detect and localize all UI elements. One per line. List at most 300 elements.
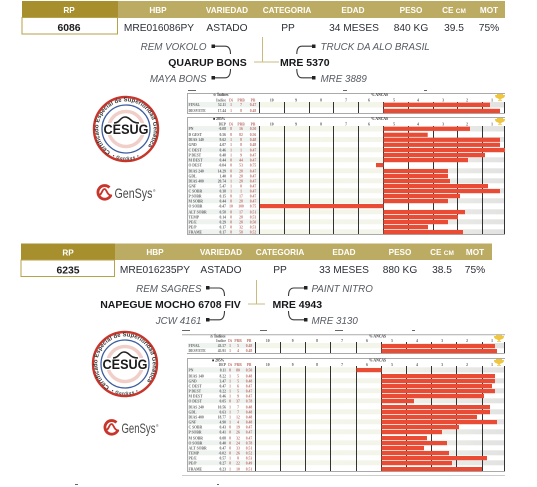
- chart: DEP traits: 0.23: [220, 468, 226, 472]
- pedigree: MRE 4943: [272, 299, 322, 311]
- logo: GenSys: GenSys: [122, 420, 156, 436]
- data row: ASTADO: [206, 23, 248, 34]
- chart: DEP traits: 0.47: [250, 179, 256, 183]
- chart: DEP traits: 3: [442, 122, 444, 126]
- pedigree: [141, 37, 430, 85]
- icon: trophy: [495, 118, 505, 125]
- chart: indices summary: DESVETE: [188, 349, 206, 353]
- chart: DEP traits: GND: [188, 143, 197, 147]
- chart: DEP traits: 1: [229, 410, 231, 414]
- chart: DEP traits: ■ 285%: [213, 117, 226, 121]
- data row: 33 MESES: [319, 265, 369, 276]
- pedigree: NAPEGUE MOCHO 6708 FIV: [100, 299, 241, 311]
- chart: DEP traits: PN: [188, 127, 194, 131]
- data row: MRE016086PY: [124, 23, 194, 34]
- chart: DEP traits: PE/P: [188, 462, 197, 466]
- chart: DEP traits: 0.47: [250, 153, 256, 157]
- chart: DEP traits: 0.47: [250, 184, 256, 188]
- chart: DEP traits: 1: [491, 122, 493, 126]
- chart: indices summary: PB: [247, 339, 252, 343]
- chart: DEP traits: 28: [239, 179, 243, 183]
- pedigree: PAINT NITRO: [312, 284, 373, 295]
- chart: indices summary: 2: [466, 98, 468, 102]
- chart: DEP traits: 5: [237, 374, 239, 378]
- chart: DEP traits: TEMP: [188, 215, 200, 219]
- chart: DEP traits: 58: [239, 230, 243, 234]
- logo: GenSys: [105, 420, 159, 436]
- chart: DEP traits: 8: [229, 400, 231, 404]
- chart: DEP traits: 1: [491, 363, 493, 367]
- chart: DEP traits: 8: [230, 225, 232, 229]
- chart: DEP traits: 0.47: [246, 394, 252, 398]
- chart: DEP traits: 5: [237, 390, 239, 394]
- header bar: [22, 1, 505, 18]
- chart: DEP traits: 22: [236, 462, 240, 466]
- chart: indices summary: 10: [270, 98, 274, 102]
- chart: DEP traits: 8: [229, 462, 231, 466]
- chart: DEP traits: 1: [230, 143, 232, 147]
- chart: DEP traits: 0.53: [250, 215, 256, 219]
- chart: DEP traits: 8: [229, 442, 231, 446]
- icon: trophy: [495, 94, 505, 101]
- seal: CESUG: Certificado Especial de Superioridad Genética: [94, 97, 158, 154]
- chart: indices summary: 1: [230, 103, 232, 107]
- chart: indices summary: 6: [366, 339, 368, 343]
- chart: DEP traits: P DEST: [188, 153, 202, 157]
- chart: DEP traits: 8: [240, 184, 242, 188]
- chart: DEP traits: 1: [229, 456, 231, 460]
- chart: indices summary: 4: [237, 349, 239, 353]
- data row: 75%: [479, 23, 499, 34]
- chart: DEP traits: 0.47: [220, 384, 226, 388]
- chart: indices summary: 10: [266, 339, 270, 343]
- chart: DEP traits: 0.40: [220, 442, 226, 446]
- chart: DEP traits: 0.47: [246, 426, 252, 430]
- chart: DEP traits: 8: [240, 138, 242, 142]
- data row: [21, 260, 485, 276]
- chart: indices summary: 7: [240, 103, 242, 107]
- header bar: RP: [63, 6, 75, 15]
- chart: DEP traits: O SOBR: [188, 204, 203, 208]
- chart: DEP traits: 8: [240, 143, 242, 147]
- chart: DEP traits: 0.48: [246, 406, 252, 410]
- data row: MRE016235PY: [120, 265, 190, 276]
- chart: indices summary: 1: [229, 349, 231, 353]
- chart: indices summary: 2: [466, 339, 468, 343]
- chart: DEP traits: 8: [229, 368, 231, 372]
- chart: DEP traits: C SOBR: [188, 189, 202, 193]
- chart: indices summary: PRB: [234, 339, 242, 343]
- header bar: VARIEDAD: [206, 6, 248, 15]
- header bar: [21, 244, 492, 260]
- chart: indices summary: % ANCAS: [371, 93, 388, 97]
- chart: DEP traits: 0.50: [250, 127, 256, 131]
- chart: DEP traits: 4: [416, 363, 418, 367]
- chart: DEP traits: 4: [237, 420, 239, 424]
- chart: DEP traits: 5: [393, 122, 395, 126]
- chart: DEP traits: 0.50: [246, 368, 252, 372]
- chart: DEP traits: TEMP: [188, 452, 200, 456]
- chart: DEP traits: C DEST: [188, 384, 202, 388]
- chart: DEP traits: 80: [236, 368, 240, 372]
- section: animal 6086: [22, 1, 505, 235]
- chart: DEP traits: 8: [230, 169, 232, 173]
- pedigree: QUARUP BONS: [168, 57, 247, 69]
- chart: DEP traits: 17: [239, 194, 243, 198]
- pedigree: REM SAGRES: [136, 284, 202, 295]
- chart: DEP traits: 1: [229, 420, 231, 424]
- data row: ASTADO: [200, 265, 242, 276]
- chart: DEP traits: 1.40: [220, 174, 226, 178]
- chart: indices summary: 7: [345, 98, 347, 102]
- chart: indices summary: 0.48: [246, 349, 252, 353]
- chart: DEP traits: 32: [239, 225, 243, 229]
- chart: DEP traits: M DEST: [188, 158, 203, 162]
- chart: DEP traits: 0.44: [220, 199, 226, 203]
- chart: DEP traits: 16: [239, 127, 243, 131]
- chart: indices summary: Indice: [216, 339, 226, 343]
- chart: DEP traits: 2: [466, 363, 468, 367]
- chart: DEP traits: 10.56: [218, 406, 226, 410]
- chart: DEP traits: 7: [237, 406, 239, 410]
- header bar: PESO: [400, 6, 423, 15]
- chart: DEP traits: 0.47: [250, 158, 256, 162]
- chart: DEP traits: 1: [240, 189, 242, 193]
- chart: DEP traits: 0.47: [246, 384, 252, 388]
- chart: DEP traits: 8: [230, 230, 232, 234]
- header bar: HBP: [146, 248, 164, 257]
- chart: DEP traits: 0.78: [246, 442, 252, 446]
- icon: trophy: [494, 359, 504, 366]
- pedigree: [100, 280, 373, 327]
- chart: DEP traits: 0.46: [220, 394, 226, 398]
- pedigree: REM VOKOLO: [141, 42, 207, 53]
- chart: indices summary: % ANCAS: [369, 334, 386, 338]
- chart: indices summary: 17.44: [218, 109, 226, 113]
- chart: DEP traits: 24: [236, 442, 240, 446]
- chart: DEP traits: 53: [239, 163, 243, 167]
- chart: DEP traits: DIAS 400: [188, 179, 204, 183]
- chart: DEP traits: 1: [230, 179, 232, 183]
- pedigree: MAYA BONS: [150, 74, 207, 85]
- chart: DEP traits: 0.52: [250, 230, 256, 234]
- chart: DEP traits: DIAS 240: [188, 406, 204, 410]
- chart: DEP traits: 6: [366, 363, 368, 367]
- chart: DEP traits: PRB: [237, 122, 245, 126]
- data row: 880 KG: [383, 265, 417, 276]
- chart: DEP traits: 0.46: [220, 148, 226, 152]
- chart: DEP traits: 0.14: [220, 215, 226, 219]
- chart: DEP traits: 0.63: [220, 410, 226, 414]
- chart: DEP traits: 1: [229, 406, 231, 410]
- chart: DEP traits: D GEST: [188, 133, 202, 137]
- pedigree: JCW 4161: [155, 316, 202, 327]
- chart: DEP traits: 0.48: [246, 420, 252, 424]
- chart: DEP traits: P DEST: [188, 390, 202, 394]
- chart: DEP traits: 0.75: [250, 204, 256, 208]
- chart: DEP traits: 10: [229, 204, 233, 208]
- chart: DEP traits: 28: [239, 199, 243, 203]
- chart: DEP traits: GND: [188, 380, 197, 384]
- chart: DEP traits: -0.04: [218, 163, 226, 167]
- header bar: EDAD: [341, 6, 365, 15]
- chart: DEP traits: 4: [417, 122, 419, 126]
- chart: DEP traits: 20.74: [218, 179, 226, 183]
- chart: DEP traits: % ANCAS: [369, 358, 386, 362]
- header bar: EDAD: [332, 248, 356, 257]
- seal: CESUG: • GenSys •: [112, 390, 138, 396]
- chart: DEP traits: 8: [230, 133, 232, 137]
- chart: DEP traits: 26: [236, 430, 240, 434]
- chart: DEP traits: 0.11: [220, 368, 226, 372]
- chart: DEP traits: 8: [230, 199, 232, 203]
- chart: DEP traits: 32: [236, 436, 240, 440]
- chart: DEP traits: 17: [239, 210, 243, 214]
- chart: DEP traits: P SOBR: [188, 430, 202, 434]
- data row: PP: [273, 265, 287, 276]
- chart: DEP traits: 0.51: [250, 210, 256, 214]
- chart: DEP traits: 0.41: [220, 430, 226, 434]
- chart: DEP traits: C SOBR: [188, 426, 202, 430]
- chart: DEP traits: 0.48: [220, 153, 226, 157]
- data row: 6086: [57, 23, 81, 34]
- chart: DEP traits: 0.52: [246, 452, 252, 456]
- chart: DEP traits: PE/E: [188, 220, 197, 224]
- chart: DEP traits: 28: [239, 215, 243, 219]
- pedigree: MRE 5370: [280, 57, 330, 69]
- chart: indices summary: Di: [228, 339, 232, 343]
- seal: CESUG: • GenSys •: [112, 155, 138, 161]
- chart: DEP traits: -0.47: [218, 204, 226, 208]
- chart: indices summary: 8: [320, 98, 322, 102]
- chart: DEP traits: 8: [230, 127, 232, 131]
- chart: indices summary: 9: [292, 339, 294, 343]
- chart: DEP traits: GDL: [188, 410, 197, 414]
- chart: DEP traits: PB: [247, 363, 252, 367]
- chart: DEP traits: 1: [230, 148, 232, 152]
- chart: indices summary: 8: [316, 339, 318, 343]
- chart: DEP traits: 8: [230, 194, 232, 198]
- chart: DEP traits: 8: [230, 215, 232, 219]
- chart: indices summary: 3: [442, 98, 444, 102]
- chart: DEP traits: 0.38: [220, 189, 226, 193]
- data row: [22, 18, 499, 34]
- chart: DEP traits: FRAME: [188, 230, 203, 234]
- chart: DEP traits: 7: [341, 363, 343, 367]
- chart: indices summary: DESVETE: [188, 109, 206, 113]
- chart: DEP traits: 37: [236, 400, 240, 404]
- chart: DEP traits: DIAS 400: [188, 416, 204, 420]
- chart: DEP traits: 0.47: [250, 199, 256, 203]
- data row: 38.5: [432, 265, 452, 276]
- chart: DEP traits: 8: [230, 158, 232, 162]
- chart: DEP traits: M SOBR: [188, 436, 203, 440]
- chart: DEP traits: 4.90: [220, 420, 226, 424]
- chart: indices summary: 1: [230, 109, 232, 113]
- chart: DEP traits: 0.08: [220, 436, 226, 440]
- chart: DEP traits: 3: [441, 363, 443, 367]
- chart: DEP traits: 0.58: [220, 210, 226, 214]
- chart: DEP traits: [187, 117, 505, 234]
- chart: DEP traits: 0.29: [220, 220, 226, 224]
- chart: DEP traits: 0.47: [250, 189, 256, 193]
- seal: CESUG: Certificado Especial de Superioridad Genética: [93, 332, 156, 390]
- chart: indices summary: 8: [240, 109, 242, 113]
- chart: DEP traits: GNF: [188, 420, 197, 424]
- chart: DEP traits: 1: [240, 148, 242, 152]
- chart: DEP traits: 8: [316, 363, 318, 367]
- chart: DEP traits: 0.27: [220, 462, 226, 466]
- chart: DEP traits: 8: [237, 456, 239, 460]
- chart: indices summary: 3: [441, 339, 443, 343]
- chart: DEP traits: 100: [238, 204, 244, 208]
- seal: CESUG: CESUG: [102, 356, 148, 372]
- chart: DEP traits: Di: [228, 363, 232, 367]
- chart: DEP traits: 8: [230, 220, 232, 224]
- chart: indices summary: FINAL: [188, 344, 201, 348]
- chart: DEP traits: 0.44: [220, 158, 226, 162]
- chart: indices summary: 4: [416, 339, 418, 343]
- chart: indices summary: PRB: [237, 98, 245, 102]
- chart: indices summary: 0.48: [250, 109, 256, 113]
- chart: DEP traits: 1: [229, 394, 231, 398]
- header bar: CE CM: [442, 6, 466, 15]
- chart: DEP traits: 1: [229, 468, 231, 472]
- chart: DEP traits: 0.75: [250, 163, 256, 167]
- chart: DEP traits: 9: [292, 363, 294, 367]
- chart: DEP traits: 9: [240, 153, 242, 157]
- pedigree: MRE 3130: [312, 316, 358, 327]
- pedigree: TRUCK DA ALO BRASIL: [320, 42, 430, 53]
- chart: DEP traits: 0.05: [220, 400, 226, 404]
- chart: DEP traits: 0.47: [220, 446, 226, 450]
- chart: DEP traits: GDL: [188, 174, 197, 178]
- chart: indices summary: [182, 334, 505, 354]
- chart: DEP traits: 1: [230, 153, 232, 157]
- chart: DEP traits: 4.07: [220, 143, 226, 147]
- chart: DEP traits: Di: [229, 122, 233, 126]
- chart: DEP traits: DIAS 140: [188, 374, 204, 378]
- chart: DEP traits: DEP: [219, 122, 227, 126]
- chart: DEP traits: ALT SOBR: [188, 210, 207, 214]
- chart: indices summary: 0.47: [250, 103, 256, 107]
- seal: CESUG: CESUG: [104, 121, 149, 137]
- chart: DEP traits: 33: [236, 446, 240, 450]
- chart: DEP traits: 0.56: [250, 133, 256, 137]
- logo: GenSys: [98, 185, 156, 201]
- chart: DEP traits: 8: [320, 122, 322, 126]
- chart: DEP traits: 28: [239, 169, 243, 173]
- data row: 6235: [56, 266, 80, 276]
- chart: DEP traits: 8: [229, 436, 231, 440]
- data row: 840 KG: [394, 23, 428, 34]
- chart: DEP traits: 0.48: [246, 374, 252, 378]
- chart: DEP traits: 18.77: [218, 416, 226, 420]
- chart: indices summary: 5: [393, 98, 395, 102]
- chart: DEP traits: 9: [295, 122, 297, 126]
- chart: DEP traits: 8: [229, 446, 231, 450]
- chart: DEP traits: 0.50: [250, 220, 256, 224]
- chart: DEP traits: 0.17: [220, 230, 226, 234]
- chart: DEP traits: GNF: [188, 184, 197, 188]
- chart: indices summary: Indice: [216, 98, 226, 102]
- chart: DEP traits: PE/P: [188, 225, 197, 229]
- chart: DEP traits: 8: [230, 163, 232, 167]
- chart: DEP traits: 28: [239, 174, 243, 178]
- chart: indices summary: 43.57: [218, 344, 226, 348]
- chart: DEP traits: 0.57: [220, 456, 226, 460]
- chart: DEP traits: 10: [236, 468, 240, 472]
- chart: DEP traits: 0.56: [220, 133, 226, 137]
- header bar: CATEGORIA: [263, 6, 311, 15]
- chart: DEP traits: 1: [229, 390, 231, 394]
- chart: DEP traits: DEP: [219, 363, 227, 367]
- header bar: MOT: [480, 6, 498, 15]
- section: animal 6235: [20, 244, 505, 476]
- chart: DEP traits: 0.47: [246, 430, 252, 434]
- chart: DEP traits: 1: [229, 416, 231, 420]
- chart: DEP traits: 10: [270, 122, 274, 126]
- chart: DEP traits: 8.22: [220, 374, 226, 378]
- pedigree: MRE 3889: [320, 74, 367, 85]
- chart: DEP traits: 12: [236, 416, 240, 420]
- chart: DEP traits: 26: [236, 452, 240, 456]
- chart: indices summary: 6: [368, 98, 370, 102]
- data row: 39.5: [444, 23, 464, 34]
- logo: GenSys: ®: [156, 424, 159, 428]
- chart: DEP traits: 0.47: [250, 194, 256, 198]
- chart: DEP traits: 6: [237, 384, 239, 388]
- chart: DEP traits: 0.51: [246, 446, 252, 450]
- chart: DEP traits: P SOBR: [188, 194, 202, 198]
- chart: DEP traits: 8: [230, 210, 232, 214]
- chart: DEP traits: 10: [266, 363, 270, 367]
- chart: DEP traits: 0.78: [246, 400, 252, 404]
- chart: DEP traits: 1: [229, 384, 231, 388]
- chart: DEP traits: [182, 358, 505, 476]
- chart: DEP traits: 0.47: [246, 436, 252, 440]
- chart: DEP traits: 0.47: [250, 174, 256, 178]
- chart: DEP traits: O SOBR: [188, 442, 203, 446]
- chart: DEP traits: -0.08: [218, 127, 226, 131]
- chart: DEP traits: PN: [188, 368, 194, 372]
- chart: DEP traits: 0.15: [220, 194, 226, 198]
- chart: DEP traits: 1: [230, 138, 232, 142]
- chart: indices summary: 1: [491, 98, 493, 102]
- chart: indices summary: 1: [491, 339, 493, 343]
- chart: indices summary: 9: [295, 98, 297, 102]
- chart: indices summary: 1: [229, 344, 231, 348]
- chart: DEP traits: 6: [368, 122, 370, 126]
- chart: DEP traits: 8: [229, 452, 231, 456]
- chart: DEP traits: 1: [230, 189, 232, 193]
- data row: PP: [281, 23, 295, 34]
- chart: DEP traits: 3.47: [220, 380, 226, 384]
- chart: DEP traits: 1: [230, 184, 232, 188]
- chart: indices summary: 5: [391, 339, 393, 343]
- chart: indices summary: 7: [341, 339, 343, 343]
- data row: 75%: [465, 265, 485, 276]
- chart: DEP traits: 0.47: [250, 148, 256, 152]
- chart: DEP traits: 8: [229, 430, 231, 434]
- chart: DEP traits: 5: [391, 363, 393, 367]
- chart: DEP traits: 0.48: [250, 143, 256, 147]
- chart: DEP traits: 0.53: [250, 225, 256, 229]
- data row: 34 MESES: [329, 23, 379, 34]
- chart: DEP traits: 0.48: [246, 380, 252, 384]
- chart: DEP traits: ALT SOBR: [188, 446, 207, 450]
- chart: DEP traits: PB: [251, 122, 256, 126]
